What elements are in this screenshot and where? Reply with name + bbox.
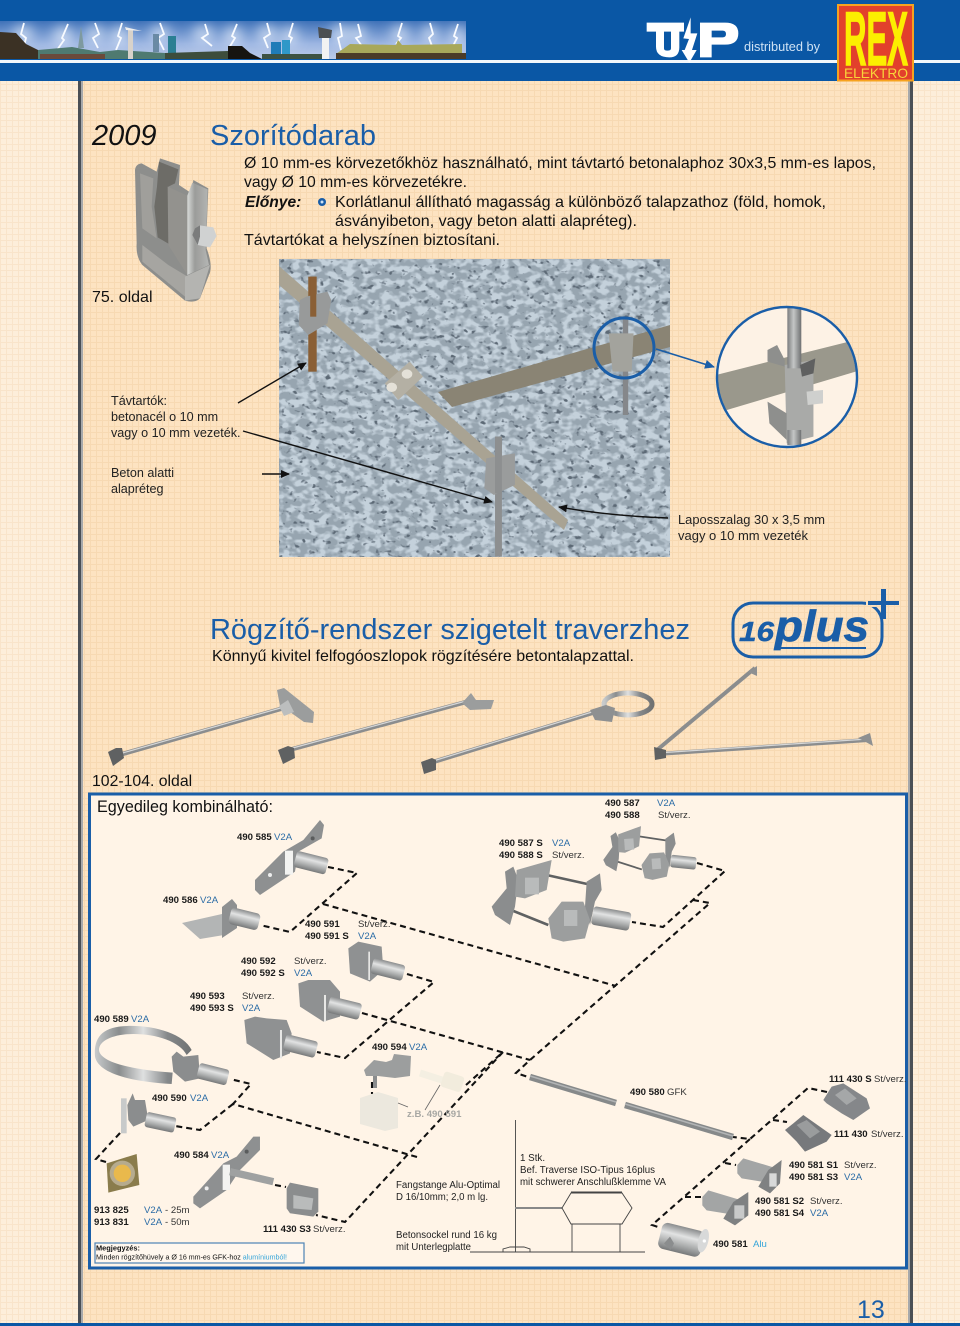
part 490 584 bbox=[174, 1137, 273, 1208]
note box: Minden rögzítőhüvely a Ø 16 mm-es GFK-hoz alumíniumból! bbox=[96, 1252, 287, 1262]
part 490 586 bbox=[163, 895, 261, 939]
part 490 592: St/verz. bbox=[294, 956, 327, 967]
part 913 825 sleeve: 913 825 bbox=[94, 1205, 129, 1216]
panel heading: Egyedileg kombinálható: bbox=[97, 797, 273, 816]
part 490 593: 490 593 S bbox=[190, 1003, 234, 1014]
part 490 581 S2 and S4: 490 581 S2 bbox=[755, 1196, 804, 1207]
part 490 581 Alu barrel: Alu bbox=[753, 1239, 767, 1250]
part 490 586: V2A bbox=[200, 895, 219, 906]
body text: description: Korlátlanul állítható magasság a különböző talapzathoz (föld, homok, bbox=[335, 194, 826, 211]
part 490 590 bbox=[121, 1093, 209, 1133]
part 490 581 S1 and S3: 490 581 S3 bbox=[789, 1172, 838, 1183]
part 490 591 bbox=[305, 919, 406, 982]
text: air rod note: Fangstange Alu-Optimal bbox=[396, 1180, 500, 1191]
part 490 581 S1 and S3 bbox=[737, 1158, 877, 1193]
part 490 586: 490 586 bbox=[163, 895, 198, 906]
text: concrete base note: mit Unterlegplatte bbox=[396, 1242, 472, 1253]
text: traverse note bbox=[520, 1153, 666, 1188]
body text: description: Ø 10 mm-es körvezetőkhöz használható, mint távtartó betonalaphoz 30x3,5 mm-es lapos, bbox=[244, 155, 876, 172]
part 490 581 S1 and S3: St/verz. bbox=[844, 1160, 877, 1171]
part 490 594 with plug: 490 594 bbox=[372, 1042, 407, 1053]
part 490 589 ring clamp: V2A bbox=[131, 1014, 150, 1025]
part 913 825 sleeve: V2A bbox=[144, 1217, 163, 1228]
detail inset: clamp close-up bbox=[716, 305, 857, 447]
callout: flat strip: vagy o 10 mm vezeték bbox=[678, 529, 809, 543]
callout: spacers: Távtartók: bbox=[111, 394, 167, 408]
part 490 591: 490 591 S bbox=[305, 931, 349, 942]
part 913 825 sleeve: - 50m bbox=[165, 1217, 190, 1228]
part 490 592 bbox=[241, 956, 362, 1022]
part 490 581 Alu barrel bbox=[657, 1222, 767, 1258]
text: concrete base note bbox=[396, 1230, 497, 1253]
logo: 16plus: plus bbox=[774, 602, 869, 651]
body text: description: ásványibeton, vagy beton alatti alapréteg). bbox=[335, 213, 637, 230]
logo: REX Elektro bbox=[838, 0, 913, 82]
callout: sub-base: Beton alatti bbox=[111, 466, 174, 480]
logo: REX Elektro: ELEKTRO bbox=[844, 65, 908, 81]
body text: description bbox=[244, 155, 876, 249]
part 490 594 with plug bbox=[360, 1042, 503, 1131]
page reference 75: 75. oldal bbox=[92, 289, 152, 306]
part 490 581 S1 and S3: 490 581 S1 bbox=[789, 1160, 839, 1171]
part 490 587 S and 490 588 S bbox=[492, 838, 632, 942]
part 490 592: 490 592 S bbox=[241, 968, 285, 979]
part 490 587 S and 490 588 S: V2A bbox=[552, 838, 571, 849]
part 913 825 sleeve bbox=[94, 1154, 190, 1228]
part 490 592: V2A bbox=[294, 968, 313, 979]
banner: city skyline with lightning bbox=[0, 21, 466, 59]
icon: steel clamp bbox=[135, 158, 217, 302]
body text: description: vagy Ø 10 mm-es körvezetékre. bbox=[244, 174, 467, 191]
highlight circle and arrow bbox=[594, 318, 714, 378]
part 111 430 S bbox=[823, 1074, 907, 1120]
part 490 594 with plug: V2A bbox=[409, 1042, 428, 1053]
callout: flat strip bbox=[678, 513, 825, 543]
distributed by label: distributed by bbox=[744, 40, 821, 54]
part 490 580 GFK rods: 490 580 bbox=[630, 1087, 665, 1098]
part 490 591: St/verz. bbox=[358, 919, 391, 930]
part 490 584: 490 584 bbox=[174, 1150, 209, 1161]
part 490 581 S1 and S3: V2A bbox=[844, 1172, 863, 1183]
part 111 430 bbox=[785, 1115, 904, 1152]
part 111 430 S3 bbox=[263, 1183, 346, 1235]
text: traverse note: mit schwerer Anschlußklemme VA bbox=[520, 1177, 666, 1188]
body text: description: Távtartókat a helyszínen biztosítani. bbox=[244, 232, 500, 249]
mounting rods row bbox=[108, 666, 873, 774]
part 913 825 sleeve: 913 831 bbox=[94, 1217, 129, 1228]
part 111 430 S3: 111 430 S3 bbox=[263, 1224, 311, 1235]
logo: 16plus: 16 bbox=[739, 616, 774, 647]
part 490 589 ring clamp: 490 589 bbox=[94, 1014, 129, 1025]
year heading: 2009 bbox=[91, 120, 157, 152]
part 490 581 S2 and S4 bbox=[702, 1190, 843, 1225]
photo: flat strip on gravel bed bbox=[279, 259, 670, 557]
text: concrete base note: Betonsockel rund 16 kg bbox=[396, 1230, 497, 1241]
callout: sub-base: alapréteg bbox=[111, 482, 164, 496]
text: air rod note: D 16/10mm; 2,0 m lg. bbox=[396, 1192, 488, 1203]
part 111 430: St/verz. bbox=[871, 1129, 904, 1140]
part 913 825 sleeve: - 25m bbox=[165, 1205, 190, 1216]
part 490 587 and 490 588 bbox=[601, 798, 698, 883]
part 490 580 GFK rods: GFK bbox=[667, 1087, 687, 1098]
page number: 13 bbox=[857, 1296, 885, 1324]
part 490 581 S2 and S4: 490 581 S4 bbox=[755, 1208, 805, 1219]
part 490 581 Alu barrel: 490 581 bbox=[713, 1239, 748, 1250]
part 111 430 S: St/verz. bbox=[874, 1074, 907, 1085]
part 490 584: V2A bbox=[211, 1150, 230, 1161]
part 111 430 S: 111 430 S bbox=[829, 1074, 872, 1085]
part 490 585 bbox=[237, 820, 329, 895]
part 490 581 S2 and S4: V2A bbox=[810, 1208, 829, 1219]
callout: spacers bbox=[111, 394, 240, 440]
callout: flat strip: Laposszalag 30 x 3,5 mm bbox=[678, 513, 825, 527]
text: traverse note: 1 Stk. bbox=[520, 1153, 545, 1164]
part 490 594 with plug: z.B. 490 591 bbox=[407, 1109, 462, 1120]
note box: Megjegyzés: bbox=[96, 1244, 140, 1252]
logo: J/P bbox=[647, 17, 738, 63]
part 490 587 S and 490 588 S: 490 588 S bbox=[499, 850, 543, 861]
part 490 593: 490 593 bbox=[190, 991, 225, 1002]
title: insulated system: Rögzítő-rendszer szigetelt traverzhez bbox=[210, 614, 690, 646]
title: Szorítódarab: Szorítódarab bbox=[210, 120, 376, 152]
part 490 590: V2A bbox=[190, 1093, 209, 1104]
callout: spacers: vagy o 10 mm vezeték. bbox=[111, 426, 240, 440]
part 490 585: V2A bbox=[274, 832, 293, 843]
schematic: air termination rod on socket bbox=[470, 1120, 645, 1252]
part 490 587 and 490 588: 490 587 bbox=[605, 798, 640, 809]
part 111 430 S3: St/verz. bbox=[313, 1224, 346, 1235]
part 490 587 and 490 588: St/verz. bbox=[658, 810, 691, 821]
part 490 585: 490 585 bbox=[237, 832, 272, 843]
part 490 587 and 490 588: 490 588 bbox=[605, 810, 640, 821]
text: air rod note bbox=[396, 1180, 500, 1203]
part 490 590: 490 590 bbox=[152, 1093, 187, 1104]
page reference 102-104: 102-104. oldal bbox=[92, 773, 192, 790]
part 490 592: 490 592 bbox=[241, 956, 276, 967]
text: traverse note: Bef. Traverse ISO-Tipus 16plus bbox=[520, 1165, 655, 1176]
header band bbox=[0, 0, 960, 81]
part 490 589 ring clamp bbox=[94, 1014, 230, 1086]
callout: sub-base bbox=[111, 466, 174, 496]
logo: 16plus bbox=[733, 589, 900, 657]
callout: spacers: betonacél o 10 mm bbox=[111, 410, 218, 424]
part 490 593: St/verz. bbox=[242, 991, 275, 1002]
part 111 430: 111 430 bbox=[834, 1129, 868, 1140]
part 490 587 and 490 588: V2A bbox=[657, 798, 676, 809]
panel: combinations diagram bbox=[90, 794, 907, 1268]
part 490 593: V2A bbox=[242, 1003, 261, 1014]
part 490 593 bbox=[190, 991, 318, 1060]
part 490 591: V2A bbox=[358, 931, 377, 942]
arrows: callout leaders bbox=[238, 363, 668, 518]
part 490 587 S and 490 588 S: St/verz. bbox=[552, 850, 585, 861]
part 490 587 S and 490 588 S: 490 587 S bbox=[499, 838, 543, 849]
part 490 580 GFK rods bbox=[530, 1076, 733, 1137]
subtitle: Könnyű kivitel felfogóoszlopok rögzítésére betontalapzattal. bbox=[212, 648, 634, 665]
part 490 591: 490 591 bbox=[305, 919, 340, 930]
part 913 825 sleeve: V2A bbox=[144, 1205, 163, 1216]
body text: description: Előnye: bbox=[245, 194, 301, 211]
connection dashed lines bbox=[96, 863, 827, 1228]
part 490 581 S2 and S4: St/verz. bbox=[810, 1196, 843, 1207]
note box bbox=[95, 1243, 304, 1263]
